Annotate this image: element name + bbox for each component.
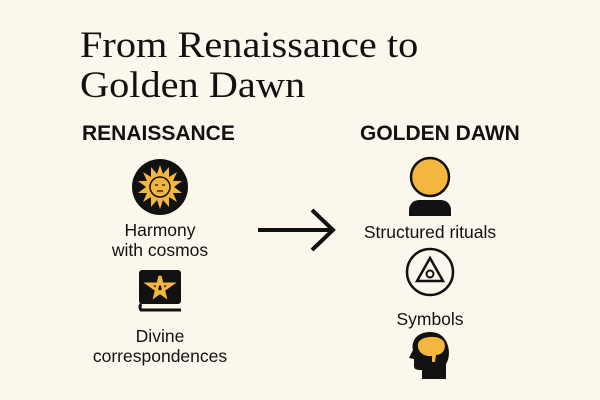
title [80, 25, 418, 106]
text: divine: correspondences [93, 346, 227, 366]
heading: golden dawn: GOLDEN DAWN [360, 122, 520, 145]
text: divine [93, 326, 227, 366]
text: harmony: Harmony [124, 220, 196, 240]
arrow [258, 208, 336, 252]
icon: person [409, 156, 451, 216]
text: harmony [112, 220, 208, 260]
icon: sun [132, 159, 188, 215]
text: harmony: with cosmos [112, 240, 208, 260]
title: From Renaissance to [80, 25, 418, 66]
icon: book [138, 270, 181, 312]
icon: eye triangle [406, 248, 454, 296]
text: structured rituals: Structured rituals [364, 222, 496, 242]
text: divine: Divine [136, 326, 184, 346]
heading: renaissance: RENAISSANCE [82, 122, 235, 145]
icon: head with brain [409, 332, 449, 379]
title: Golden Dawn [80, 65, 305, 106]
text: symbols: Symbols [396, 309, 464, 329]
